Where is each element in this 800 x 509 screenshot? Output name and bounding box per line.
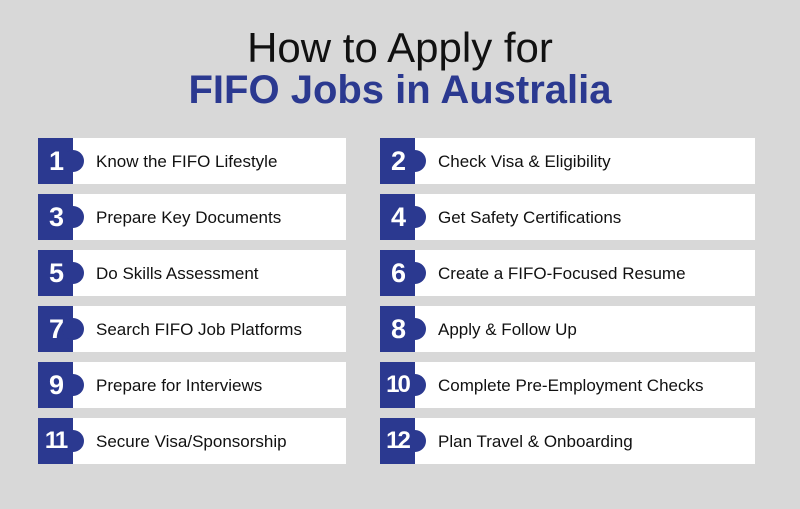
step 7: Search FIFO Job Platforms [96,320,302,339]
step 8: Apply & Follow Up [438,320,577,339]
step 12: Plan Travel & Onboarding [438,432,633,451]
step 9 [38,362,346,408]
subtitle: FIFO Jobs in Australia [188,68,612,112]
step 2: Check Visa & Eligibility [438,152,611,171]
step 5: Do Skills Assessment [96,264,258,283]
step 1: 1 [49,146,62,176]
title: How to Apply for [247,24,553,71]
step 3: 3 [49,202,62,232]
step 12: 12 [386,427,409,454]
step 9: 9 [49,370,62,400]
step 11: Secure Visa/Sponsorship [96,432,287,451]
step 6: Create a FIFO-Focused Resume [438,264,686,283]
step 8 [380,306,755,352]
step 3 [38,194,346,240]
step 4: Get Safety Certifications [438,208,621,227]
step 10: Complete Pre-Employment Checks [438,376,703,395]
step 11: 11 [45,427,66,454]
step 1: Know the FIFO Lifestyle [96,152,277,171]
step 5 [38,250,346,296]
step 10 [380,362,755,408]
step 6 [380,250,755,296]
step 3: Prepare Key Documents [96,208,281,227]
step 4 [380,194,755,240]
step 6: 6 [391,258,404,288]
step 7: 7 [49,314,62,344]
step 9: Prepare for Interviews [96,376,262,395]
step 12 [380,418,755,464]
step 5: 5 [49,258,62,288]
step 4: 4 [391,202,404,232]
step 7 [38,306,346,352]
step 11 [38,418,346,464]
step 2: 2 [391,146,404,176]
step 2 [380,138,755,184]
step 10: 10 [386,371,409,398]
step 8: 8 [391,314,404,344]
step 1 [38,138,346,184]
